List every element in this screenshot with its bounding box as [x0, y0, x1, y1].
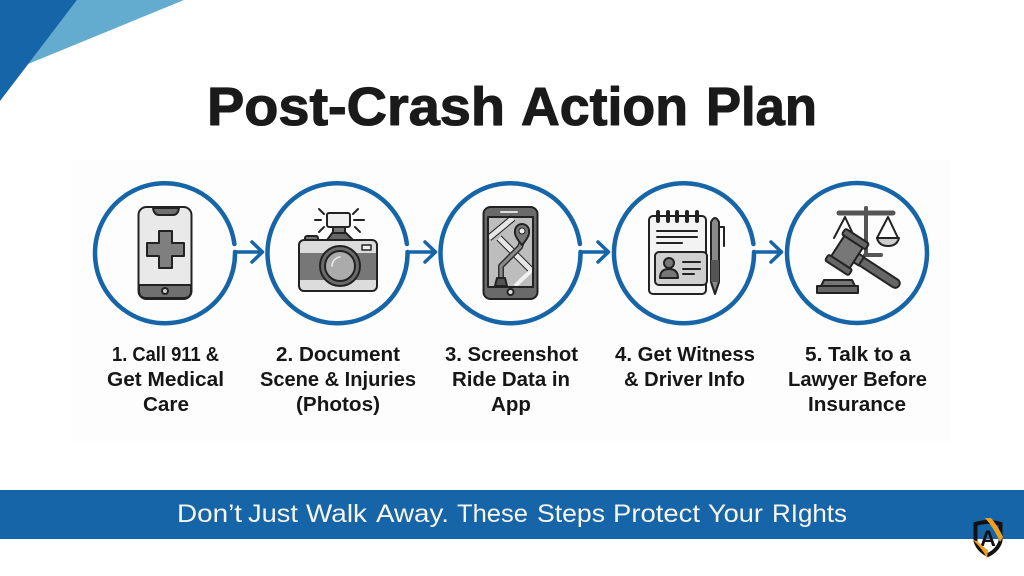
- label 4: & Driver Info: [624, 369, 745, 391]
- label 3: 3. Screenshot: [445, 344, 578, 366]
- label 3: [445, 344, 578, 416]
- banner text: Steps: [537, 500, 605, 528]
- circle and arrow 1: [95, 183, 262, 323]
- icon: phone with map: [484, 207, 538, 299]
- label 3: App: [491, 394, 531, 416]
- label 1: Care: [143, 394, 189, 416]
- banner: [0, 490, 1024, 539]
- title: Action: [521, 77, 688, 137]
- banner text: Protect: [613, 500, 700, 528]
- label 2: Scene & Injuries: [260, 369, 416, 391]
- title: [207, 77, 817, 137]
- step 3: screenshot ride data: [441, 183, 608, 416]
- icon: gavel and scales: [817, 208, 909, 302]
- label 2: [260, 344, 416, 416]
- banner text: Don’t: [177, 500, 242, 528]
- banner text: RIghts: [772, 500, 847, 528]
- logo: shield: A: [980, 526, 996, 551]
- step 1: call 911: [95, 183, 262, 416]
- label 4: 4. Get Witness: [615, 344, 755, 366]
- icon: phone with medical cross: [138, 207, 192, 299]
- label 4: [615, 344, 755, 391]
- logo: shield: [973, 518, 1003, 559]
- icon: notepad, ID card and pen: [649, 212, 724, 294]
- step 5: talk to a lawyer: [787, 183, 927, 416]
- step 4: witness and driver info: [614, 183, 782, 391]
- label 5: 5. Talk to a: [805, 344, 912, 366]
- circle 5: [787, 183, 927, 323]
- icon: camera: [299, 209, 377, 291]
- title: Plan: [706, 77, 817, 137]
- label 5: [788, 344, 927, 416]
- label 2: 2. Document: [276, 344, 400, 366]
- title: Post-Crash: [207, 77, 505, 137]
- label 2: (Photos): [296, 394, 380, 416]
- corner accent: dark blue triangle: [0, 0, 77, 101]
- label 3: Ride Data in: [452, 369, 570, 391]
- banner text: Your: [708, 500, 763, 528]
- banner text: [177, 500, 847, 528]
- banner text: Walk: [306, 500, 368, 528]
- banner text: These: [457, 500, 528, 528]
- circle and arrow 4: [614, 183, 782, 323]
- banner text: Just: [248, 500, 298, 528]
- banner text: Away.: [376, 500, 449, 528]
- circle and arrow 2: [268, 183, 436, 323]
- label 1: Get Medical: [107, 369, 224, 391]
- circle and arrow 3: [441, 183, 608, 323]
- label 5: Lawyer Before: [788, 369, 927, 391]
- corner accent: light blue triangle: [28, 0, 184, 64]
- label 1: [107, 344, 224, 416]
- label 5: Insurance: [808, 394, 906, 416]
- step 2: document scene: [260, 183, 436, 416]
- label 1: 1. Call 911 &: [112, 344, 219, 366]
